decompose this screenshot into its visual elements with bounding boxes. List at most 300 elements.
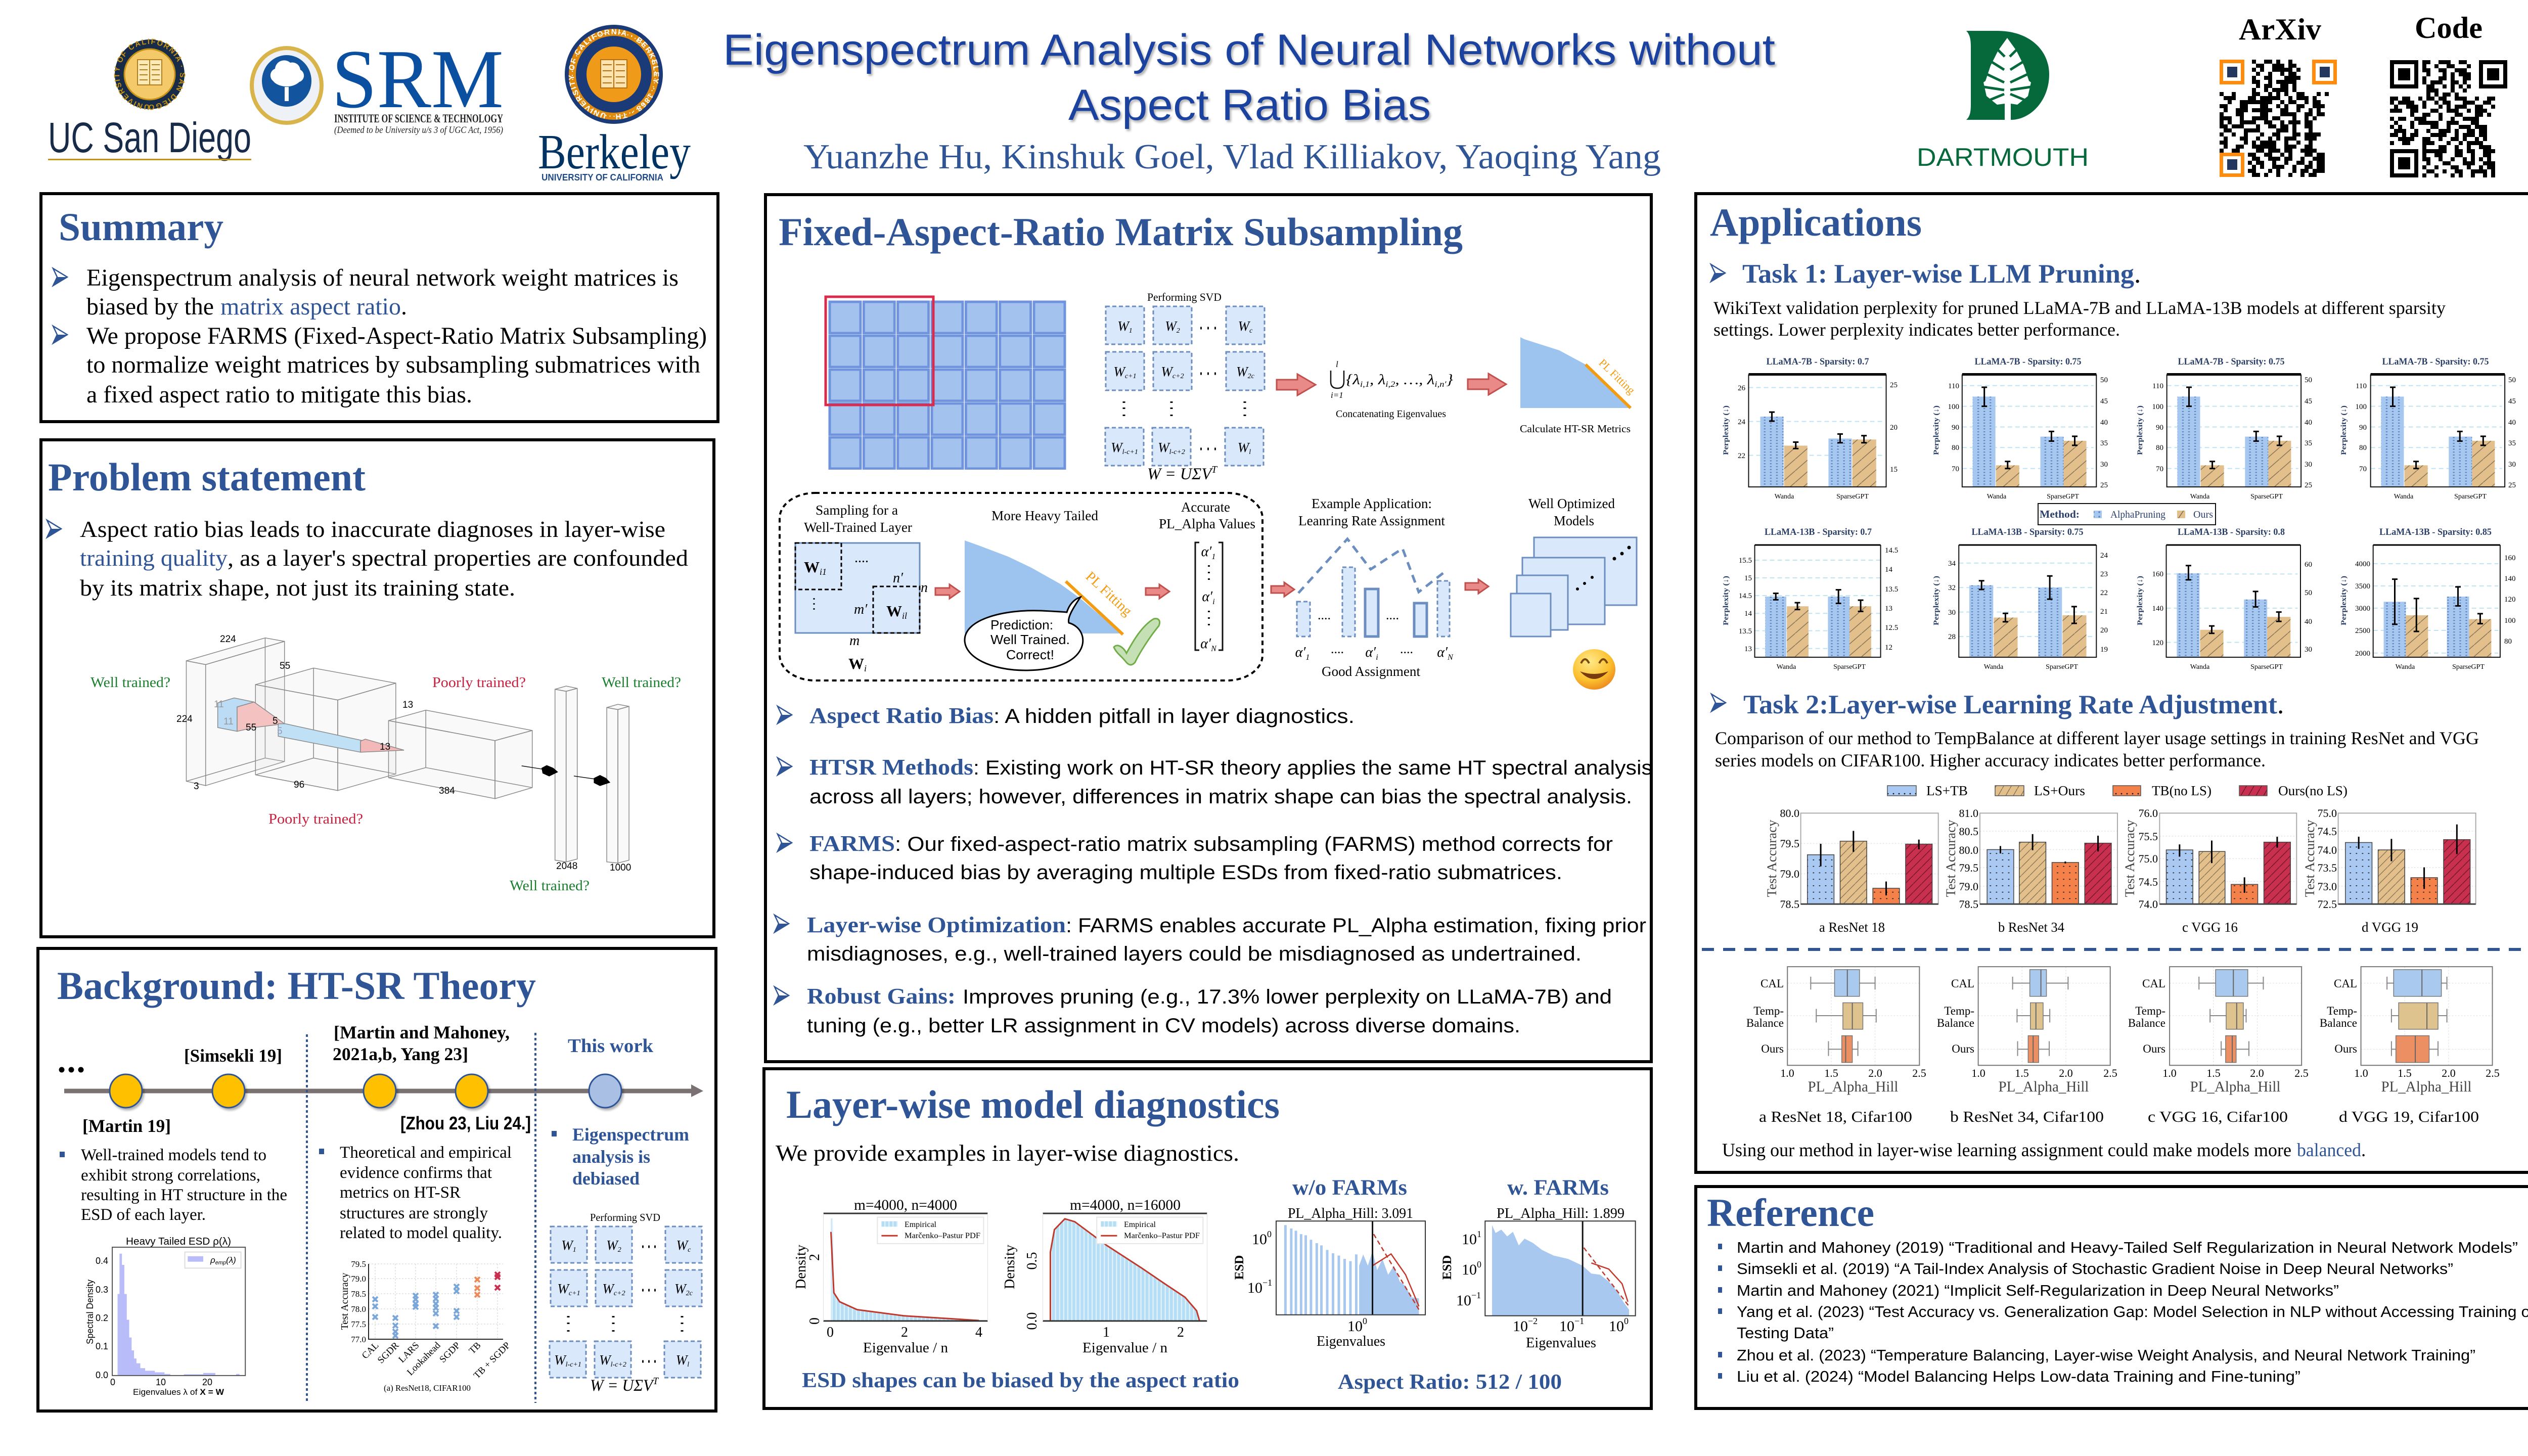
formula: concatenating eigenvalues: {λ [1346, 372, 1358, 388]
bar chart: ResNet 18 accuracy: 78.5 [1780, 898, 1799, 911]
subheading: Task 1: Task 1: Layer-wise LLM Pruning [1742, 259, 2134, 289]
formula: concatenating eigenvalues [1331, 359, 1453, 420]
legend: learning rate methods: TB(no LS) [2152, 783, 2211, 798]
diagram: well optimized models [1511, 496, 1637, 636]
subheading: Task 2: . [2277, 690, 2284, 719]
bar chart: LLaMA-13B sparsity 0.7: 14.5 [1739, 592, 1752, 600]
bar chart: LLaMA-13B sparsity 0.75: 19 [2100, 646, 2108, 654]
panel: Applications [1696, 194, 2528, 1172]
bar chart: LLaMA-13B sparsity 0.7: 12 [1885, 644, 1892, 652]
diagram: performing SVD: c+1 [1125, 373, 1137, 380]
bar chart: LLaMA-7B sparsity 0.75 (second): 100 [2152, 403, 2163, 411]
bar chart: LLaMA-13B sparsity 0.75: 24 [2100, 552, 2108, 560]
chart: heavy tailed ESD histogram: ρ [210, 1255, 215, 1265]
text: right bullet: analysis is [572, 1147, 650, 1167]
bar chart: LLaMA-7B sparsity 0.75 (second): 35 [2305, 439, 2312, 447]
diagram: convolutional network layers: 5 [277, 726, 283, 737]
chart: ESD without FARMs: 10 [1247, 1280, 1262, 1296]
panel: Summary [41, 194, 718, 422]
bar chart: LLaMA-13B sparsity 0.7: Wanda [1777, 663, 1796, 671]
diagram: SVD sub-matrices: W [561, 1238, 573, 1253]
arrow [1465, 579, 1488, 594]
bar chart: LLaMA-7B sparsity 0.75: 50 [2100, 376, 2108, 384]
diagram: learning rate assignment: α′ [1365, 645, 1376, 660]
bar chart: LLaMA-7B sparsity 0.75 (third): 50 [2508, 376, 2516, 384]
formula: concatenating eigenvalues: , λ [1370, 372, 1385, 388]
bar chart: VGG 19 accuracy: 73.0 [2318, 880, 2337, 893]
caption: aspect ratio: Aspect Ratio: 512 / 100 [1338, 1371, 1562, 1394]
diagram: learning rate assignment: Example Application: [1312, 496, 1432, 511]
bar chart: LLaMA-7B sparsity 0.75: Wanda [1987, 493, 2007, 500]
bar chart: LLaMA-7B sparsity 0.75 (third): 30 [2508, 461, 2516, 469]
bar chart: LLaMA-13B sparsity 0.7: LLaMA-13B - Sparsity: 0.7 [1765, 527, 1872, 537]
bar chart: ResNet 34 accuracy: 80.5 [1959, 825, 1978, 838]
bar chart: VGG 16 accuracy: 74.0 [2139, 898, 2158, 911]
bar chart: LLaMA-13B sparsity 0.7: Perplexity (↓) [1722, 576, 1730, 625]
timeline [59, 1067, 703, 1108]
bar chart: LLaMA-13B sparsity 0.8: 120 [2152, 639, 2163, 647]
text: intro: We provide examples in layer-wise diagnostics. [776, 1140, 1239, 1166]
bar chart: LLaMA-13B sparsity 0.8: Wanda [2190, 663, 2210, 671]
bar chart: LLaMA-7B sparsity 0.75: SparseGPT [2047, 493, 2079, 500]
bar chart: LLaMA-13B sparsity 0.7: 13.5 [1739, 627, 1752, 635]
chart: ESD m=4000 n=4000: 0 [807, 1317, 823, 1325]
bar chart: LLaMA-7B sparsity 0.7: 26 [1738, 384, 1745, 392]
bar chart: LLaMA-7B sparsity 0.75 (second): 30 [2305, 461, 2312, 469]
chart: ESD without FARMs: 10 [1252, 1231, 1267, 1248]
bar chart: LLaMA-7B sparsity 0.75 (second): 80 [2156, 444, 2163, 452]
bullets: FARMS takeaways: Robust Gains: [807, 984, 956, 1009]
box plot: VGG 16: Temp- [2135, 1005, 2165, 1017]
chart: test accuracy scatter: 78.0 [351, 1304, 366, 1314]
bar chart: VGG 16 accuracy: 76.0 [2139, 807, 2158, 820]
box plot: VGG 16: 2.5 [2294, 1067, 2309, 1079]
chart: ESD m=4000 n=4000: Eigenvalue / n [863, 1340, 948, 1356]
box plot: VGG 16: PL_Alpha_Hill [2190, 1078, 2280, 1095]
diagram: SVD sub-matrices: W [602, 1281, 614, 1296]
bar chart: LLaMA-13B sparsity 0.85: 4000 [2355, 560, 2370, 568]
chart: test accuracy scatter: LARS [396, 1340, 422, 1365]
bar chart: ResNet 34 accuracy: b ResNet 34 [1998, 920, 2064, 935]
bar chart: LLaMA-13B sparsity 0.7: 14.5 [1885, 547, 1898, 555]
box plot: VGG 19: CAL [2334, 977, 2357, 990]
bar chart: LLaMA-7B sparsity 0.75 (third): 90 [2359, 424, 2367, 432]
heading: Problem statement: Problem statement [48, 455, 366, 499]
diagram: convolutional network layers: 55 [246, 722, 256, 733]
logo: Dartmouth: DARTMOUTH [1917, 143, 2089, 171]
formula: concatenating eigenvalues: l [1336, 359, 1338, 369]
diagram: learning rate assignment: .... [1331, 642, 1344, 656]
box plot: ResNet 34: 2.0 [2059, 1067, 2073, 1079]
chart: ESD with FARMs: 0 [1477, 1259, 1481, 1269]
diagram: SVD sub-matrices: 1 [573, 1246, 576, 1254]
chart: ESD m=4000 n=16000: Eigenvalue / n [1082, 1340, 1167, 1356]
arrow [1468, 374, 1506, 395]
bar chart: ResNet 18 accuracy: 79.5 [1780, 837, 1799, 850]
diagram: SVD sub-matrices: W [554, 1352, 566, 1368]
diagram: convolutional network layers: Poorly trained? [432, 674, 526, 691]
diagram: performing SVD: W [1158, 440, 1169, 455]
chart: spectrum with PL fitting [1520, 337, 1638, 435]
chart: ESD m=4000 n=4000 [793, 1197, 987, 1356]
chart: ESD with FARMs: w. FARMs [1507, 1176, 1609, 1200]
bar chart: LLaMA-13B sparsity 0.7: 13 [1885, 605, 1892, 613]
bar chart: LLaMA-13B sparsity 0.7: 12.5 [1885, 624, 1898, 632]
bullets: FARMS takeaways: : Our fixed-aspect-ratio matrix subsampling (FARMS) method corrects for [895, 833, 1613, 855]
bullets: summary text: to normalize weight matrices by subsampling submatrices with [86, 351, 700, 378]
bar chart: LLaMA-7B sparsity 0.75 (third): LLaMA-7B - Sparsity: 0.75 [2382, 356, 2489, 367]
chart: heavy tailed ESD histogram: Eigenvalues λ of X = W [133, 1387, 224, 1397]
chart: ESD without FARMs: −1 [1262, 1278, 1272, 1288]
diagram: convolutional network layers: Poorly trained? [268, 811, 363, 827]
bar chart: VGG 19 accuracy [2303, 807, 2476, 935]
text: sampling heading: Well-Trained Layer [804, 520, 912, 535]
bar chart: LLaMA-7B sparsity 0.75 (third): Perplexity (↓) [2340, 405, 2348, 455]
bar chart: LLaMA-13B sparsity 0.8: Perplexity (↓) [2136, 576, 2144, 625]
legend: learning rate methods [1887, 783, 2348, 798]
diagram: convolutional network layers: 96 [294, 780, 304, 790]
box plot: ResNet 34: CAL [1951, 977, 1974, 990]
heading: FARMS: Fixed-Aspect-Ratio Matrix Subsampling [779, 210, 1463, 254]
formula: concatenating eigenvalues: i=1 [1331, 390, 1343, 400]
title [723, 26, 1775, 129]
subheading: Task 2: Task 2:Layer-wise Learning Rate Adjustment [1743, 690, 2277, 719]
chart: ESD without FARMs: 0 [1267, 1229, 1272, 1239]
chart: heavy tailed ESD histogram: 0.2 [96, 1313, 108, 1323]
diagram: weight matrix sampling: il [902, 611, 907, 621]
box plot: VGG 19 [2320, 967, 2500, 1125]
list: references: Testing Data” [1737, 1324, 1834, 1342]
bar chart: LLaMA-13B sparsity 0.8: 140 [2152, 605, 2163, 613]
bar chart: ResNet 34 accuracy: 79.5 [1959, 861, 1978, 874]
formula: concatenating eigenvalues: , …, λ [1395, 372, 1434, 388]
chart: ESD without FARMs: w/o FARMs [1292, 1176, 1407, 1200]
bullets: FARMS takeaways: : A hidden pitfall in layer diagnostics. [994, 705, 1355, 727]
chart: ESD m=4000 n=4000: Marčenko–Pastur PDF [905, 1232, 980, 1240]
logo: Dartmouth [1917, 31, 2089, 171]
chart: ESD without FARMs: ESD [1233, 1255, 1246, 1280]
bar chart: LLaMA-7B sparsity 0.75: 70 [1952, 465, 1959, 473]
diagram: learning rate assignment: α′ [1295, 645, 1305, 660]
vector: PL alpha values: i [1212, 598, 1215, 606]
chart: heavy tailed spectrum with prediction: PL Fitting [1082, 569, 1135, 619]
bar chart: LLaMA-7B sparsity 0.75 (third): Wanda [2394, 493, 2414, 500]
diagram: convolutional network layers: 13 [402, 700, 413, 710]
bar chart: LLaMA-7B sparsity 0.7: SparseGPT [1836, 493, 1869, 500]
bar chart: LLaMA-13B sparsity 0.85: Perplexity (↓) [2340, 576, 2348, 625]
bar chart: LLaMA-7B sparsity 0.75: 40 [2100, 419, 2108, 427]
bar chart: LLaMA-13B sparsity 0.75: 21 [2100, 608, 2108, 616]
legend: learning rate methods: Ours(no LS) [2278, 783, 2348, 798]
text: middle bullet: related to model quality. [340, 1224, 502, 1242]
bar chart: LLaMA-13B sparsity 0.75: 20 [2100, 626, 2108, 634]
chart: heavy tailed spectrum with prediction: Well Trained. [990, 632, 1070, 647]
bar chart: LLaMA-7B sparsity 0.75 (third) [2340, 356, 2516, 500]
bar chart: LLaMA-7B sparsity 0.75 (second): 45 [2305, 397, 2312, 405]
bar chart: LLaMA-7B sparsity 0.7 [1722, 356, 1898, 500]
chart: ESD with FARMs: 10 [1559, 1318, 1574, 1335]
bar chart: LLaMA-7B sparsity 0.75 (second): 110 [2152, 382, 2163, 390]
text: left bullet: resulting in HT structure in the [81, 1186, 287, 1204]
bar chart: ResNet 18 accuracy: a ResNet 18 [1819, 920, 1885, 935]
logo: SRM: INSTITUTE OF SCIENCE & TECHNOLOGY [334, 112, 503, 125]
bar chart: LLaMA-7B sparsity 0.7: 24 [1738, 418, 1745, 426]
vector: PL alpha values: 1 [1211, 553, 1215, 561]
vector: PL alpha values: α′ [1200, 636, 1211, 652]
logo: SRM: (Deemed to be University u/s 3 of UGC Act, 1956) [334, 125, 503, 135]
box plot: ResNet 18: 1.0 [1780, 1067, 1794, 1079]
diagram: performing SVD: 1 [1129, 327, 1133, 335]
diagram: well optimized models: Models [1554, 513, 1594, 528]
box plot: ResNet 34: Balance [1937, 1017, 1974, 1029]
chart: ESD m=4000 n=16000: Empirical [1124, 1220, 1156, 1229]
bar chart: LLaMA-7B sparsity 0.75 (third): 25 [2508, 481, 2516, 489]
bar chart: LLaMA-7B sparsity 0.75 (third): 80 [2359, 444, 2367, 452]
box plot: ResNet 34: Ours [1952, 1042, 1974, 1055]
bar chart: LLaMA-13B sparsity 0.85: SparseGPT [2452, 663, 2485, 671]
bullets: FARMS takeaways: across all layers; however, differences in matrix shape can bias the spectral analysis. [809, 786, 1632, 808]
bar chart: LLaMA-7B sparsity 0.75 (second): 25 [2305, 481, 2312, 489]
bar chart: LLaMA-13B sparsity 0.75 [1932, 527, 2108, 671]
diagram: performing SVD [1105, 291, 1265, 483]
chart: ESD m=4000 n=16000: 0.5 [1024, 1252, 1040, 1270]
chart: ESD without FARMs: 10 [1347, 1318, 1363, 1335]
chart: heavy tailed spectrum with prediction [965, 540, 1160, 670]
label: Code: Code [2415, 11, 2482, 44]
diagram: SVD sub-matrices: W [599, 1352, 611, 1368]
chart: heavy tailed spectrum with prediction: Prediction: [990, 617, 1053, 632]
diagram: performing SVD: c+2 [1172, 373, 1184, 380]
chart: ESD without FARMs: 0 [1363, 1316, 1367, 1326]
box plot: VGG 16: CAL [2142, 977, 2165, 990]
box plot: VGG 16: 2.0 [2250, 1067, 2264, 1079]
formula: concatenating eigenvalues: i,2 [1385, 380, 1395, 389]
bar chart: LLaMA-13B sparsity 0.85: 160 [2504, 554, 2516, 562]
diagram: SVD sub-matrices: W [676, 1238, 688, 1253]
text: middle bullet: Theoretical and empirical [340, 1144, 512, 1162]
diagram: learning rate assignment: N [1447, 653, 1454, 662]
bar chart: LLaMA-7B sparsity 0.75 (second): Perplexity (↓) [2136, 405, 2144, 455]
bullets: summary text: . [401, 293, 407, 320]
diagram: weight matrix sampling [795, 543, 928, 673]
bar chart: LLaMA-13B sparsity 0.8: LLaMA-13B - Sparsity: 0.8 [2178, 527, 2285, 537]
bar chart: VGG 16 accuracy: 74.5 [2139, 876, 2158, 888]
chart: test accuracy scatter: 77.5 [351, 1320, 366, 1329]
bullets: FARMS takeaways [775, 703, 1652, 1037]
vector: PL alpha values: N [1210, 645, 1217, 653]
chart: heavy tailed ESD histogram: Heavy Tailed ESD ρ(λ) [126, 1236, 231, 1247]
bullets: summary text: biased by the [86, 293, 214, 320]
text: Task 2 description: series models on CIFAR100. Higher accuracy indicates better performance. [1715, 750, 2266, 770]
bar chart: LLaMA-7B sparsity 0.75 (third): 45 [2508, 397, 2516, 405]
diagram: convolutional network layers [91, 634, 681, 894]
diagram: SVD sub-matrices: c [688, 1246, 691, 1254]
chart: ESD without FARMs: Eigenvalues [1317, 1334, 1385, 1349]
diagram: weight matrix sampling: m′ [854, 602, 868, 617]
bar chart: LLaMA-13B sparsity 0.8: 60 [2305, 561, 2312, 569]
text: Task 2 description [1715, 728, 2479, 770]
box plot: VGG 19: 1.0 [2354, 1067, 2368, 1079]
diagram: performing SVD: T [1211, 464, 1218, 475]
legend: pruning method: Method: [2040, 508, 2080, 520]
text: Task 1 description: settings. Lower perplexity indicates better performance. [1713, 320, 2120, 340]
logo: Berkeley [538, 25, 691, 183]
diagram: weight matrix sampling: m [849, 633, 860, 649]
bar chart: LLaMA-7B sparsity 0.7: 22 [1738, 452, 1745, 460]
bar chart: VGG 16 accuracy: 75.0 [2139, 852, 2158, 865]
diagram: SVD sub-matrices: W [676, 1352, 687, 1368]
chart: ESD m=4000 n=4000: Empirical [905, 1220, 937, 1229]
bar chart: LLaMA-7B sparsity 0.75 (second): 50 [2305, 376, 2312, 384]
box plot: VGG 19: d VGG 19, Cifar100 [2339, 1108, 2479, 1125]
bar chart: LLaMA-7B sparsity 0.75 (second): Wanda [2190, 493, 2210, 500]
diagram: weight matrix sampling: W [886, 602, 902, 620]
chart: ESD without FARMs [1233, 1176, 1425, 1349]
box plot: VGG 19: 2.5 [2486, 1067, 2500, 1079]
text: middle bullet [319, 1144, 512, 1242]
diagram: convolutional network layers: 13 [380, 742, 390, 752]
bar chart: LLaMA-13B sparsity 0.7: 14 [1885, 566, 1893, 574]
diagram: SVD sub-matrices: c+1 [569, 1290, 580, 1297]
diagram: convolutional network layers: Well trained? [91, 674, 170, 691]
heading: Applications: Applications [1710, 200, 1922, 244]
text: middle bullet: evidence confirms that [340, 1164, 492, 1182]
bar chart: LLaMA-7B sparsity 0.75 (third): SparseGPT [2454, 493, 2487, 500]
bar chart: ResNet 34 accuracy [1944, 807, 2117, 935]
heading: Background: Background: HT-SR Theory [57, 964, 536, 1008]
vector: PL alpha values: PL_Alpha Values [1159, 516, 1255, 531]
panel: Layer-wise model diagnostics [764, 1069, 1651, 1408]
heading: layer-wise diagnostics: Layer-wise model diagnostics [786, 1082, 1280, 1126]
logo: Berkeley: Berkeley [538, 125, 691, 179]
bar chart: LLaMA-7B sparsity 0.75: LLaMA-7B - Sparsity: 0.75 [1975, 356, 2081, 367]
bar chart: LLaMA-7B sparsity 0.75: 90 [1952, 424, 1959, 432]
diagram: SVD sub-matrices: W [557, 1281, 569, 1296]
bullets: FARMS takeaways: : FARMS enables accurate PL_Alpha estimation, fixing prior [1066, 915, 1646, 937]
box plot: VGG 16: 1.5 [2206, 1067, 2221, 1079]
diagram: performing SVD: l-c+1 [1122, 448, 1138, 456]
box plot: VGG 19: Ours [2334, 1042, 2357, 1055]
bar chart: LLaMA-13B sparsity 0.7: 14 [1744, 610, 1752, 618]
legend: pruning method: AlphaPruning [2110, 509, 2165, 520]
bar chart: LLaMA-13B sparsity 0.8: SparseGPT [2250, 663, 2283, 671]
bar chart: LLaMA-13B sparsity 0.8: 30 [2305, 646, 2312, 654]
diagram: learning rate assignment: .... [1386, 608, 1399, 622]
legend: pruning method [2038, 504, 2216, 525]
bar chart: LLaMA-7B sparsity 0.75 (third): 40 [2508, 419, 2516, 427]
text: right bullet: debiased [572, 1168, 640, 1189]
logo: UC San Diego [48, 38, 251, 161]
arrow [1271, 582, 1294, 597]
box plot: ResNet 34: 2.5 [2103, 1067, 2117, 1079]
arrow [1277, 374, 1316, 395]
chart: heavy tailed ESD histogram: 0.4 [96, 1256, 108, 1266]
box plot: VGG 19: 2.0 [2442, 1067, 2456, 1079]
box plot: VGG 19: PL_Alpha_Hill [2381, 1078, 2471, 1095]
diagram: performing SVD: W [1238, 440, 1249, 455]
chart: heavy tailed ESD histogram: 0 [110, 1377, 115, 1387]
bar chart: ResNet 34 accuracy: 80.0 [1959, 844, 1978, 856]
bullets: FARMS takeaways: misdiagnoses, e.g., well-trained layers could be misdiagnosed as undertrained. [807, 943, 1582, 965]
formula: concatenating eigenvalues: i,n′ [1434, 380, 1447, 389]
text: sampling heading: Sampling for a [816, 503, 898, 518]
bar chart: LLaMA-13B sparsity 0.75: Wanda [1984, 663, 2004, 671]
chart: ESD m=4000 n=4000: m=4000, n=4000 [854, 1197, 957, 1213]
chart: heavy tailed ESD histogram: 0.3 [96, 1285, 108, 1295]
bullets: FARMS takeaways: Layer-wise Optimization [807, 913, 1066, 937]
bar chart: LLaMA-13B sparsity 0.8: 160 [2152, 570, 2163, 578]
bar chart: LLaMA-13B sparsity 0.85: 2500 [2355, 627, 2370, 635]
chart: ESD with FARMs: 10 [1513, 1318, 1528, 1335]
bar chart: VGG 16 accuracy: 75.5 [2139, 830, 2158, 843]
QR code: Code [2390, 60, 2507, 177]
bullets: FARMS takeaways: shape-induced bias by averaging multiple ESDs from fixed-ratio submatrices. [809, 861, 1562, 884]
chart: test accuracy scatter: (a) ResNet18, CIFAR100 [384, 1383, 471, 1393]
bar chart: LLaMA-13B sparsity 0.7: 15.5 [1739, 557, 1752, 565]
formula: concatenating eigenvalues: Concatenating Eigenvalues [1336, 408, 1446, 420]
chart: ESD with FARMs: PL_Alpha_Hill: 1.899 [1497, 1205, 1624, 1221]
bar chart: LLaMA-7B sparsity 0.75 (third): 110 [2356, 382, 2367, 390]
text: left bullet: Well-trained models tend to [81, 1146, 266, 1164]
diagram: SVD sub-matrices: W [606, 1238, 618, 1253]
diagram: performing SVD: 2c [1248, 373, 1255, 380]
heading: Summary: Summary [59, 205, 223, 249]
diagram: weight matrix sampling: n [921, 580, 928, 596]
diagram: performing SVD: W [1111, 440, 1122, 455]
chart: test accuracy scatter [339, 1259, 513, 1393]
diagram: performing SVD: 2 [1177, 327, 1180, 335]
bullet: problem text: Aspect ratio bias leads to inaccurate diagnoses in layer-wise [80, 516, 665, 542]
bar chart: LLaMA-13B sparsity 0.8 [2136, 527, 2312, 671]
diagram: learning rate assignment: Good Assignment [1322, 664, 1420, 679]
bar chart: LLaMA-7B sparsity 0.75: 35 [2100, 439, 2108, 447]
bar chart: LLaMA-13B sparsity 0.75: 23 [2100, 570, 2108, 578]
bar chart: LLaMA-7B sparsity 0.75: 45 [2100, 397, 2108, 405]
label: ArXiv: ArXiv [2239, 13, 2321, 46]
timeline labels [82, 1022, 654, 1136]
text: balanced conclusion: balanced [2297, 1140, 2361, 1161]
box plot: ResNet 34: PL_Alpha_Hill [1998, 1078, 2089, 1095]
bar chart: LLaMA-7B sparsity 0.7: Perplexity (↓) [1722, 405, 1730, 455]
diagram: performing SVD: Performing SVD [1147, 291, 1222, 303]
bullets: FARMS takeaways: Improves pruning (e.g., 17.3% lower perplexity on LLaMA-7B) and [963, 986, 1612, 1008]
bar chart: ResNet 18 accuracy: 79.0 [1780, 868, 1799, 880]
chart: ESD m=4000 n=16000 [1002, 1197, 1207, 1356]
list: references [1718, 1239, 2528, 1385]
bar chart: LLaMA-7B sparsity 0.7: 20 [1890, 424, 1898, 432]
list: references: Simsekli et al. (2019) “A Tail-Index Analysis of Stochastic Gradient Noise in Deep Neural Networks” [1737, 1260, 2453, 1278]
timeline labels: [Martin 19] [82, 1116, 171, 1136]
bar chart: VGG 19 accuracy: Test Accuracy [2303, 820, 2317, 897]
chart: heavy tailed ESD histogram: 10 [156, 1377, 166, 1387]
icon: check mark [1114, 619, 1160, 665]
chart: heavy tailed ESD histogram: emp [215, 1260, 226, 1266]
diagram: weight matrix sampling: i1 [820, 567, 827, 577]
bullets: FARMS takeaways: Aspect Ratio Bias [809, 703, 994, 728]
icon: smiling emoji [1573, 649, 1615, 690]
chart: ESD with FARMs: ESD [1440, 1255, 1454, 1280]
bar chart: LLaMA-13B sparsity 0.85: 100 [2504, 617, 2516, 625]
diagram: matrix grid with red selection [826, 297, 1066, 470]
diagram: SVD sub-matrices: W = UΣV [590, 1377, 656, 1395]
diagram: performing SVD: W [1161, 364, 1172, 379]
box plot: ResNet 18: 2.0 [1868, 1067, 1882, 1079]
bar chart: LLaMA-13B sparsity 0.85: 120 [2504, 596, 2516, 604]
bar chart: LLaMA-7B sparsity 0.75: 100 [1948, 403, 1959, 411]
bar chart: LLaMA-13B sparsity 0.85: LLaMA-13B - Sparsity: 0.85 [2379, 527, 2492, 537]
text: left bullet [60, 1146, 287, 1224]
legend: learning rate methods: LS+TB [1926, 783, 1968, 798]
